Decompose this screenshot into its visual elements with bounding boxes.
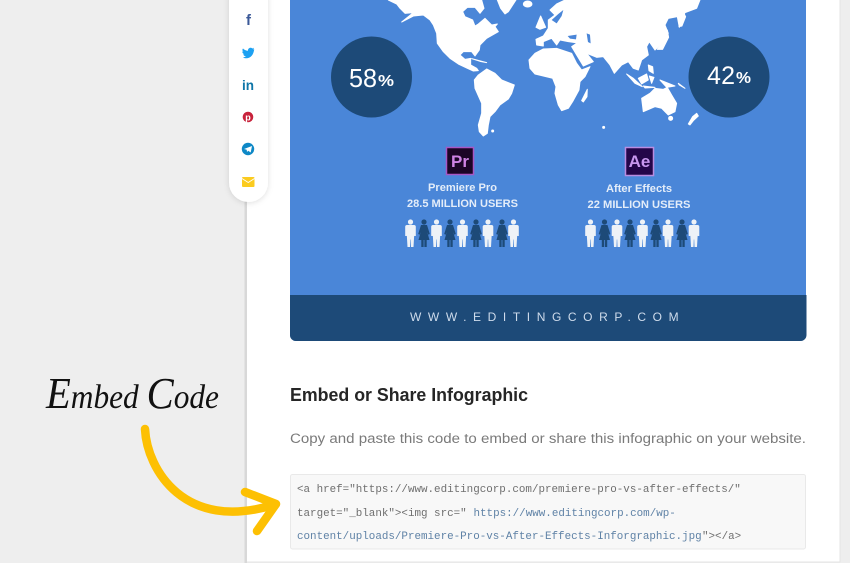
icon: facebook: f (246, 12, 252, 29)
people icons: Premiere Pro (405, 219, 519, 247)
icon: After Effects (626, 148, 654, 176)
icon: Premiere Pro (446, 148, 474, 174)
handwritten label: Embed Code: Embed Code (45, 369, 219, 418)
footer band (290, 295, 806, 341)
panel: infographic (290, 0, 806, 341)
stat: 42%: 42 (707, 62, 735, 90)
icon: telegram (242, 143, 254, 155)
code box: "></a> (702, 531, 741, 543)
label: After Effects users: 22 MILLION USERS (588, 199, 690, 211)
code box: content/uploads/Premiere-Pro-vs-After-Effects-Inforgraphic.jpg (297, 531, 702, 543)
article card (244, 0, 840, 563)
icon: After Effects: Ae (629, 152, 650, 171)
code box: target="_blank"><img src=" (297, 508, 467, 520)
label: After Effects users: After Effects (606, 183, 672, 195)
map: world (388, 0, 700, 136)
text block: instructions: Copy and paste this code to embed or share this infographic on your website. (290, 431, 806, 446)
icon: linkedin: in (242, 78, 254, 93)
code box: https://www.editingcorp.com/wp- (474, 508, 676, 520)
share sidebar (229, 0, 268, 202)
label: Premiere Pro users: Premiere Pro (428, 182, 497, 194)
people icons: After Effects (585, 219, 699, 247)
footer band: WWW.EDITINGCORP.COM (410, 310, 685, 324)
code box: <a href="https://www.editingcorp.com/premiere-pro-vs-after-effects/" (297, 484, 741, 496)
icon: mail (242, 177, 254, 187)
stat: 42%: % (736, 70, 751, 87)
label: Premiere Pro users: 28.5 MILLION USERS (407, 198, 518, 210)
stat: 58%: % (378, 73, 394, 90)
stat: 58% (331, 36, 412, 118)
arrow: to code box (145, 429, 276, 531)
label: Premiere Pro users (407, 182, 518, 210)
icon: pinterest (243, 112, 253, 122)
heading: Embed or Share Infographic (290, 385, 528, 405)
icon: Premiere Pro: Pr (451, 152, 469, 171)
stat: 58%: 58 (349, 63, 377, 93)
code box (290, 474, 806, 549)
icon: twitter (242, 48, 254, 58)
icon: pinterest: p (245, 112, 251, 122)
label: After Effects users (588, 183, 690, 211)
stat: 42% (688, 36, 770, 118)
